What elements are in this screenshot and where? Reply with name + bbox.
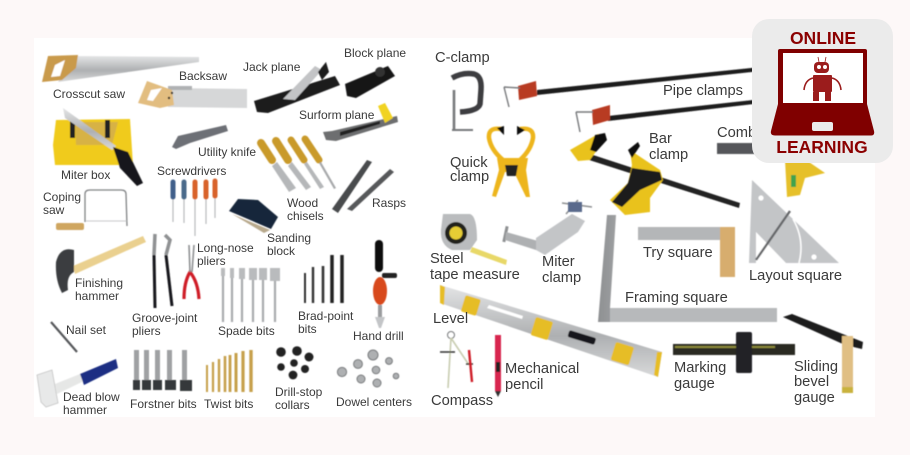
- label: drill-stop collars: collars: [275, 398, 310, 412]
- label: dowel centers: Dowel centers: [336, 395, 412, 409]
- label: compass: Compass: [431, 393, 493, 409]
- label: coping saw: saw: [43, 203, 65, 217]
- label: backsaw: Backsaw: [179, 69, 227, 83]
- label: wood chisels: Wood: [287, 196, 318, 210]
- tool: steel tape measure: [441, 214, 507, 265]
- label: brad-point bits: bits: [298, 322, 317, 336]
- label: hand drill: Hand drill: [353, 329, 404, 343]
- label: sanding block: Sanding: [267, 231, 311, 245]
- label: mechanical pencil: Mechanical: [505, 361, 579, 377]
- tool: wood chisels: [261, 139, 336, 192]
- label: sliding bevel gauge: Sliding: [794, 359, 838, 375]
- label: nail set: Nail set: [66, 323, 107, 337]
- tool: quick clamp: [489, 126, 533, 197]
- tool: marking gauge: [673, 332, 795, 373]
- label: try square: Try square: [643, 245, 713, 261]
- tool: brad-point bits: [305, 255, 342, 303]
- label: steel tape measure: tape measure: [430, 267, 520, 283]
- label: miter box: Miter box: [61, 168, 110, 182]
- label: miter clamp: Miter: [542, 254, 575, 270]
- label: framing square: Framing square: [625, 290, 728, 306]
- label: drill-stop collars: Drill-stop: [275, 385, 322, 399]
- tool: dowel centers: [337, 350, 399, 387]
- label: long-nose pliers: pliers: [197, 254, 226, 268]
- tool: groove-joint pliers: [154, 234, 172, 308]
- tool: surform plane: [323, 103, 398, 141]
- label: jack plane: Jack plane: [243, 60, 301, 74]
- label: sanding block: block: [267, 244, 296, 258]
- tool: nail set: [51, 322, 77, 352]
- label: bar clamp: clamp: [649, 147, 688, 163]
- tool: sliding bevel gauge: [783, 314, 863, 393]
- tool: miter box: [53, 108, 143, 186]
- label: mechanical pencil: pencil: [505, 377, 543, 393]
- badge: online learning: [752, 19, 893, 163]
- label: dead blow hammer: Dead blow: [63, 390, 120, 404]
- tool: utility knife: [172, 125, 228, 149]
- icon: laptop: [771, 49, 874, 136]
- tool: sanding block: [229, 199, 278, 233]
- tool: crosscut saw: [42, 55, 199, 82]
- tool: miter clamp: [502, 200, 592, 255]
- tool: try square: [638, 227, 735, 277]
- label: steel tape measure: Steel: [430, 251, 463, 267]
- label: quick clamp: Quick: [450, 155, 488, 171]
- label: twist bits: Twist bits: [204, 397, 253, 411]
- badge heading: learning: LEARNING: [776, 137, 868, 157]
- tool: combination square: [717, 143, 825, 197]
- tool: C-clamp: [452, 74, 481, 131]
- label: marking gauge: Marking: [674, 360, 726, 376]
- tool: framing square: [598, 215, 777, 322]
- label: crosscut saw: Crosscut saw: [53, 87, 125, 101]
- tool: level: [440, 285, 662, 377]
- tool: drill-stop collars: [276, 346, 314, 379]
- label: bar clamp: Bar: [649, 131, 672, 147]
- tool: backsaw: [138, 81, 247, 108]
- text labels: clamps and measuring tools: [430, 50, 848, 409]
- label: marking gauge: gauge: [674, 376, 715, 392]
- tool: bar clamp: [570, 133, 740, 215]
- text labels: cutting and drilling tools: [43, 46, 412, 417]
- label: brad-point bits: Brad-point: [298, 309, 353, 323]
- tool: spade bits: [221, 268, 280, 322]
- tool: pipe clamp lower: [576, 97, 780, 132]
- label: combination square: Combination square: [717, 125, 848, 141]
- panel: white tool sheet: [34, 38, 875, 417]
- tool: finishing hammer: [56, 236, 146, 293]
- label: level: Level: [433, 311, 468, 327]
- label: dead blow hammer: hammer: [63, 403, 107, 417]
- label: layout square: Layout square: [749, 268, 842, 284]
- tool: mechanical pencil: [495, 335, 501, 397]
- label: rasps: Rasps: [372, 196, 406, 210]
- tool: rasps: [332, 160, 394, 213]
- label: finishing hammer: Finishing: [75, 276, 123, 290]
- label: wood chisels: chisels: [287, 209, 324, 223]
- tool: dead blow hammer: [37, 359, 118, 407]
- label: groove-joint pliers: Groove-joint: [132, 311, 197, 325]
- badge heading: online: ONLINE: [790, 28, 856, 48]
- tool: twist bits: [207, 350, 251, 392]
- label: screwdrivers: Screwdrivers: [157, 164, 226, 178]
- icon: robot: [804, 57, 841, 101]
- panel: tool illustrations: [37, 55, 863, 407]
- tool: Forstner bits: [133, 350, 192, 391]
- label: sliding bevel gauge: gauge: [794, 390, 835, 406]
- label: long-nose pliers: Long-nose: [197, 241, 254, 255]
- label: miter clamp: clamp: [542, 270, 581, 286]
- label: utility knife: Utility knife: [198, 145, 256, 159]
- label: forstner bits: Forstner bits: [130, 397, 197, 411]
- label: groove-joint pliers: pliers: [132, 324, 161, 338]
- tool: jack plane: [254, 62, 340, 113]
- label: c-clamp: C-clamp: [435, 50, 490, 66]
- tool: pipe clamp upper: [504, 65, 780, 107]
- label: coping saw: Coping: [43, 190, 81, 204]
- label: surform plane: Surform plane: [299, 108, 375, 122]
- label: quick clamp: clamp: [450, 169, 489, 185]
- tool: compass: [440, 332, 473, 388]
- tool: long-nose pliers: [184, 245, 199, 299]
- tool: hand drill: [373, 240, 397, 328]
- tool: screwdrivers: [173, 181, 215, 236]
- tool: block plane: [345, 66, 395, 98]
- label: spade bits: Spade bits: [218, 324, 275, 338]
- label: sliding bevel gauge: bevel: [794, 374, 829, 390]
- label: finishing hammer: hammer: [75, 289, 119, 303]
- tool: layout square: [749, 180, 839, 263]
- label: block plane: Block plane: [344, 46, 406, 60]
- tool: coping saw: [56, 190, 127, 230]
- label: pipe clamps: Pipe clamps: [663, 83, 743, 99]
